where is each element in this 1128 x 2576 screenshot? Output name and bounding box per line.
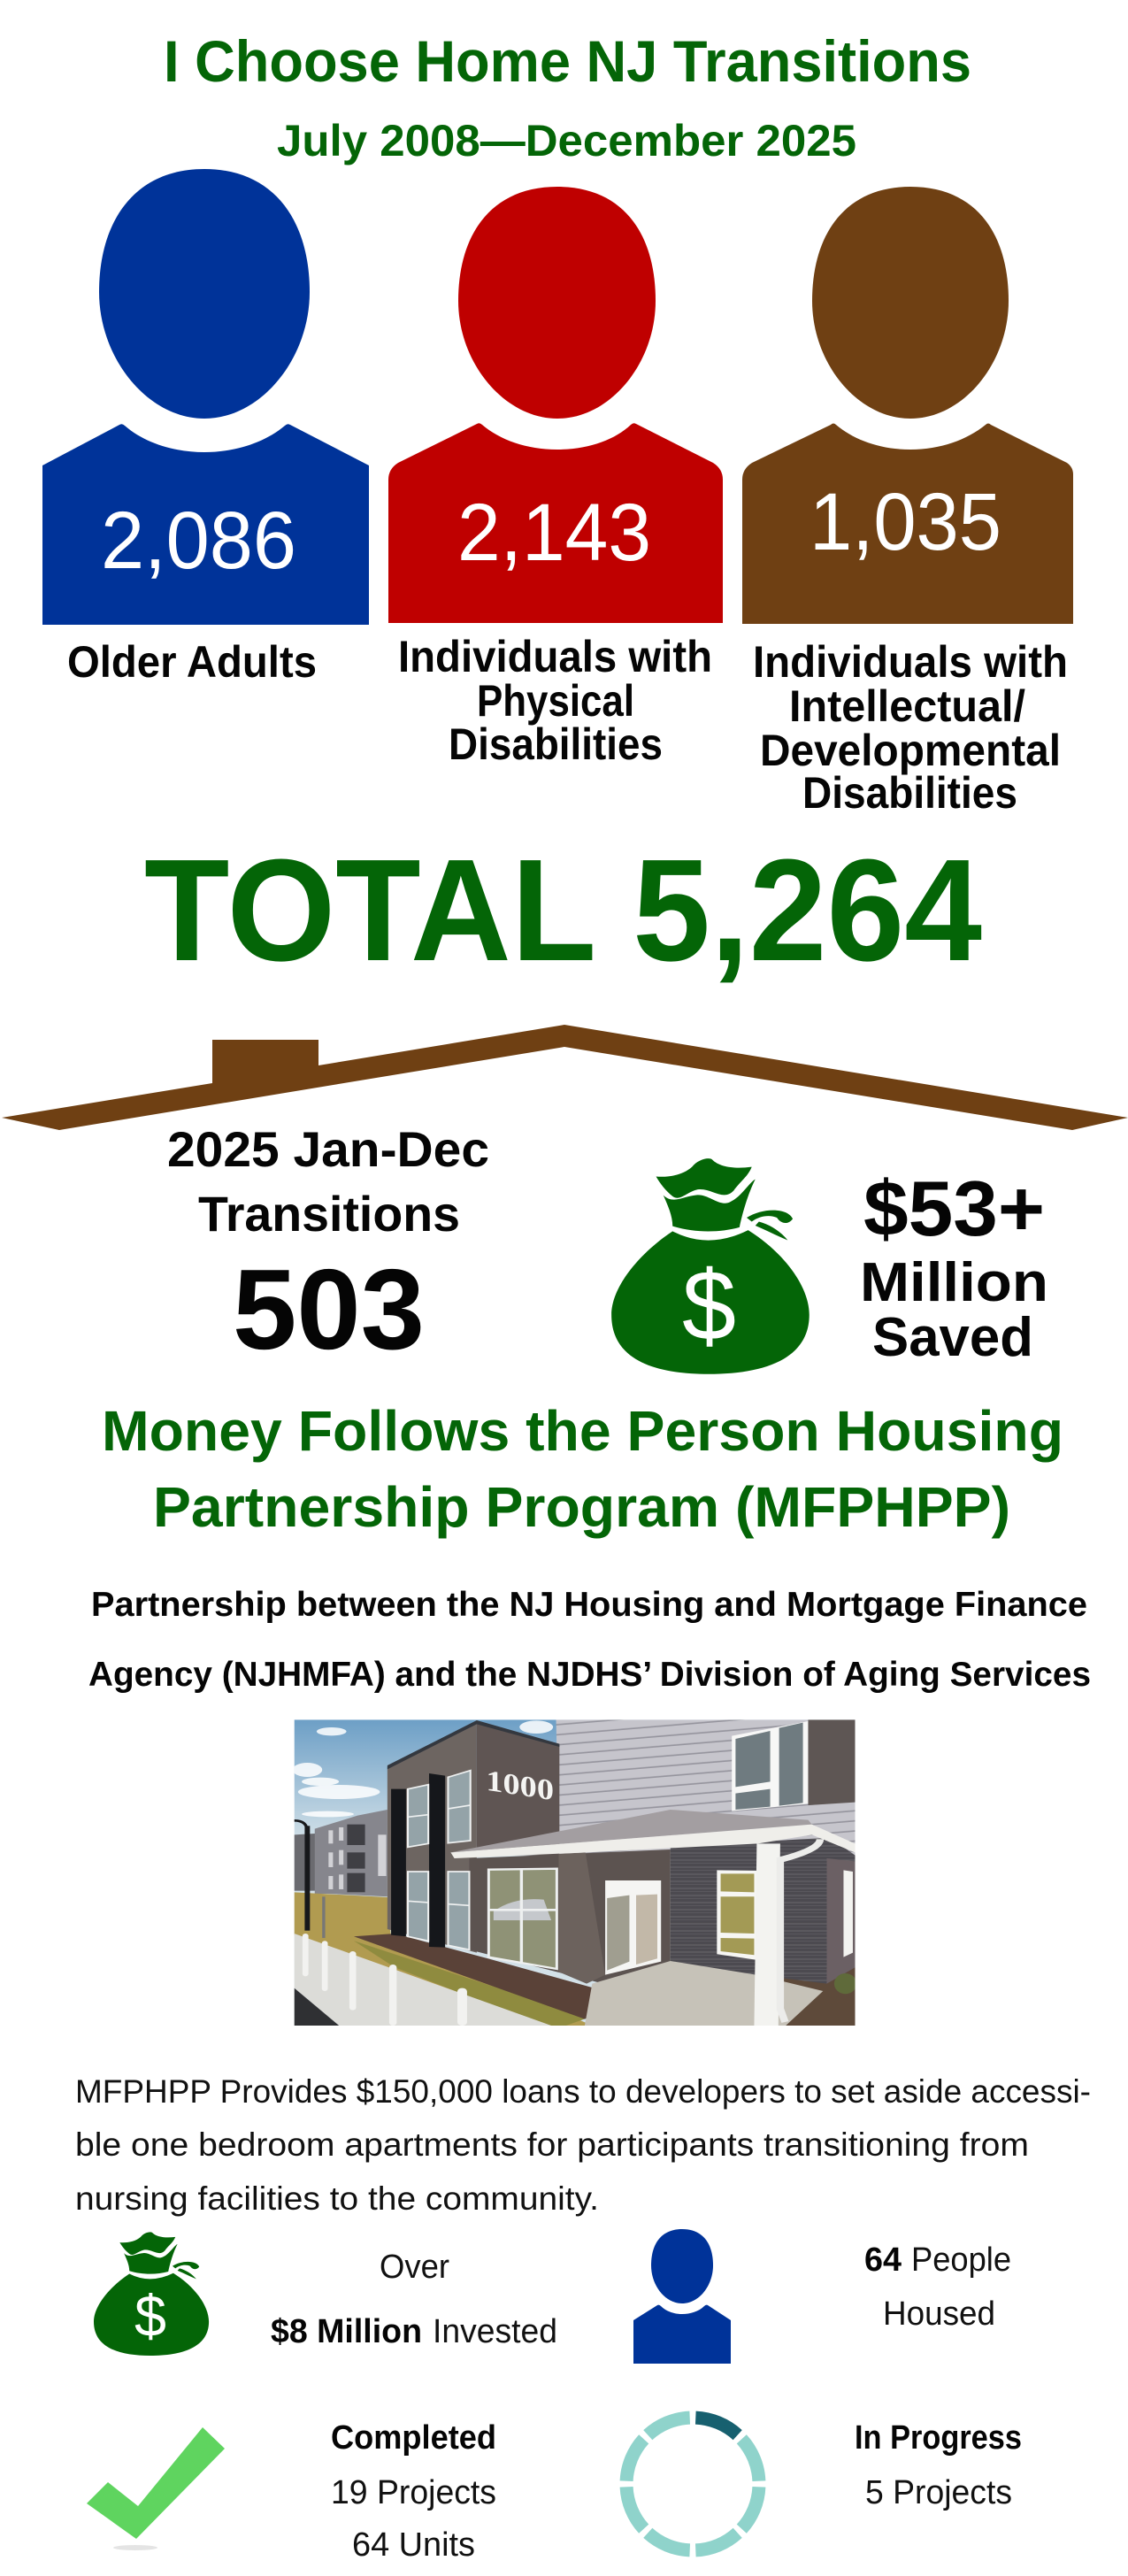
- text block: completed: 64 Units: [352, 2526, 475, 2564]
- text block: money saved: [860, 1165, 1048, 1368]
- text block: invested: Invested: [433, 2313, 557, 2350]
- text block: program description: nursing facilities to the community.: [75, 2180, 599, 2217]
- subtitle: date range: July 2008—December 2025: [277, 116, 856, 165]
- text block: money saved: Saved: [872, 1307, 1033, 1368]
- text block: people housed: [864, 2242, 1011, 2333]
- building number on photo: 1000: [486, 1765, 554, 1807]
- text block: money saved: Million: [860, 1252, 1048, 1313]
- text block: partnership description: Agency (NJHMFA) and the NJDHS’ Division of Aging Services: [88, 1656, 1091, 1694]
- icon: check mark: [87, 2427, 225, 2550]
- text block: invested: [271, 2249, 557, 2350]
- heading: MFPHPP: Money Follows the Person Housing: [102, 1399, 1063, 1463]
- text block: people housed: Housed: [883, 2295, 995, 2333]
- text block: program description: ble one bedroom apartments for participants transitioning from: [75, 2126, 1029, 2163]
- title: I Choose Home NJ Transitions: [164, 28, 971, 94]
- text block: program description: MFPHPP Provides $150,000 loans to developers to set aside accessi-: [75, 2073, 1091, 2110]
- heading: MFPHPP: [102, 1399, 1063, 1539]
- total: TOTAL 5,264: [144, 829, 982, 991]
- icon: large money bag: [611, 1158, 810, 1374]
- label: individuals with intellectual developmental disabilities: Intellectual/: [789, 681, 1025, 731]
- text block: 2025 transitions: 2025 Jan-Dec: [167, 1121, 489, 1177]
- text block: in progress: 5 Projects: [865, 2474, 1012, 2511]
- icon: small money bag: [94, 2232, 209, 2356]
- heading: MFPHPP: Partnership Program (MFPHPP): [153, 1475, 1010, 1539]
- text block: invested: $8 Million: [271, 2313, 422, 2350]
- text block: people housed: 64: [864, 2242, 902, 2279]
- text block: completed: 19 Projects: [331, 2474, 496, 2511]
- icon: small person: [633, 2229, 731, 2364]
- text block: program description: [75, 2073, 1091, 2217]
- label: individuals with physical disabilities: Physical: [477, 676, 634, 726]
- text block: 2025 transitions: Transitions: [198, 1186, 460, 1242]
- label: individuals with physical disabilities: [398, 632, 712, 769]
- label: individuals with intellectual developmental disabilities: [753, 637, 1068, 818]
- panel: older adults figure: 2,086: [101, 496, 296, 586]
- label: individuals with physical disabilities: Disabilities: [449, 719, 663, 769]
- label: individuals with intellectual developmental disabilities: Developmental: [760, 726, 1061, 775]
- text block: money saved: $53+: [863, 1165, 1045, 1252]
- panel: intellectual developmental disabilities figure: [742, 187, 1073, 624]
- text block: completed: Completed: [331, 2419, 496, 2457]
- label: older adults: Older Adults: [67, 637, 317, 687]
- label: individuals with intellectual developmental disabilities: Disabilities: [802, 768, 1017, 818]
- text block: 2025 transitions: [167, 1121, 489, 1373]
- label: individuals with physical disabilities: Individuals with: [398, 632, 712, 681]
- icon: large money bag: $: [682, 1250, 736, 1361]
- text block: 2025 transitions: 503: [233, 1246, 425, 1373]
- icon: house roof with chimney: [2, 1025, 1128, 1130]
- panel: physical disabilities figure: [388, 187, 723, 623]
- text block: people housed: People: [911, 2242, 1011, 2279]
- text block: completed: [331, 2419, 496, 2564]
- icon: progress ring: [626, 2418, 759, 2550]
- label: individuals with intellectual developmental disabilities: Individuals with: [753, 637, 1068, 687]
- text block: invested: Over: [380, 2249, 449, 2286]
- icon: small money bag: $: [134, 2283, 166, 2349]
- photo: apartment building: [293, 1719, 856, 2026]
- panel: intellectual developmental disabilities figure: 1,035: [810, 477, 1001, 567]
- text block: partnership description: Partnership between the NJ Housing and Mortgage Finance: [91, 1586, 1087, 1624]
- text block: in progress: [855, 2419, 1022, 2511]
- panel: physical disabilities figure: 2,143: [457, 488, 651, 578]
- text block: in progress: In Progress: [855, 2419, 1022, 2457]
- panel: older adults figure: [42, 169, 369, 625]
- text block: partnership description: [88, 1586, 1091, 1694]
